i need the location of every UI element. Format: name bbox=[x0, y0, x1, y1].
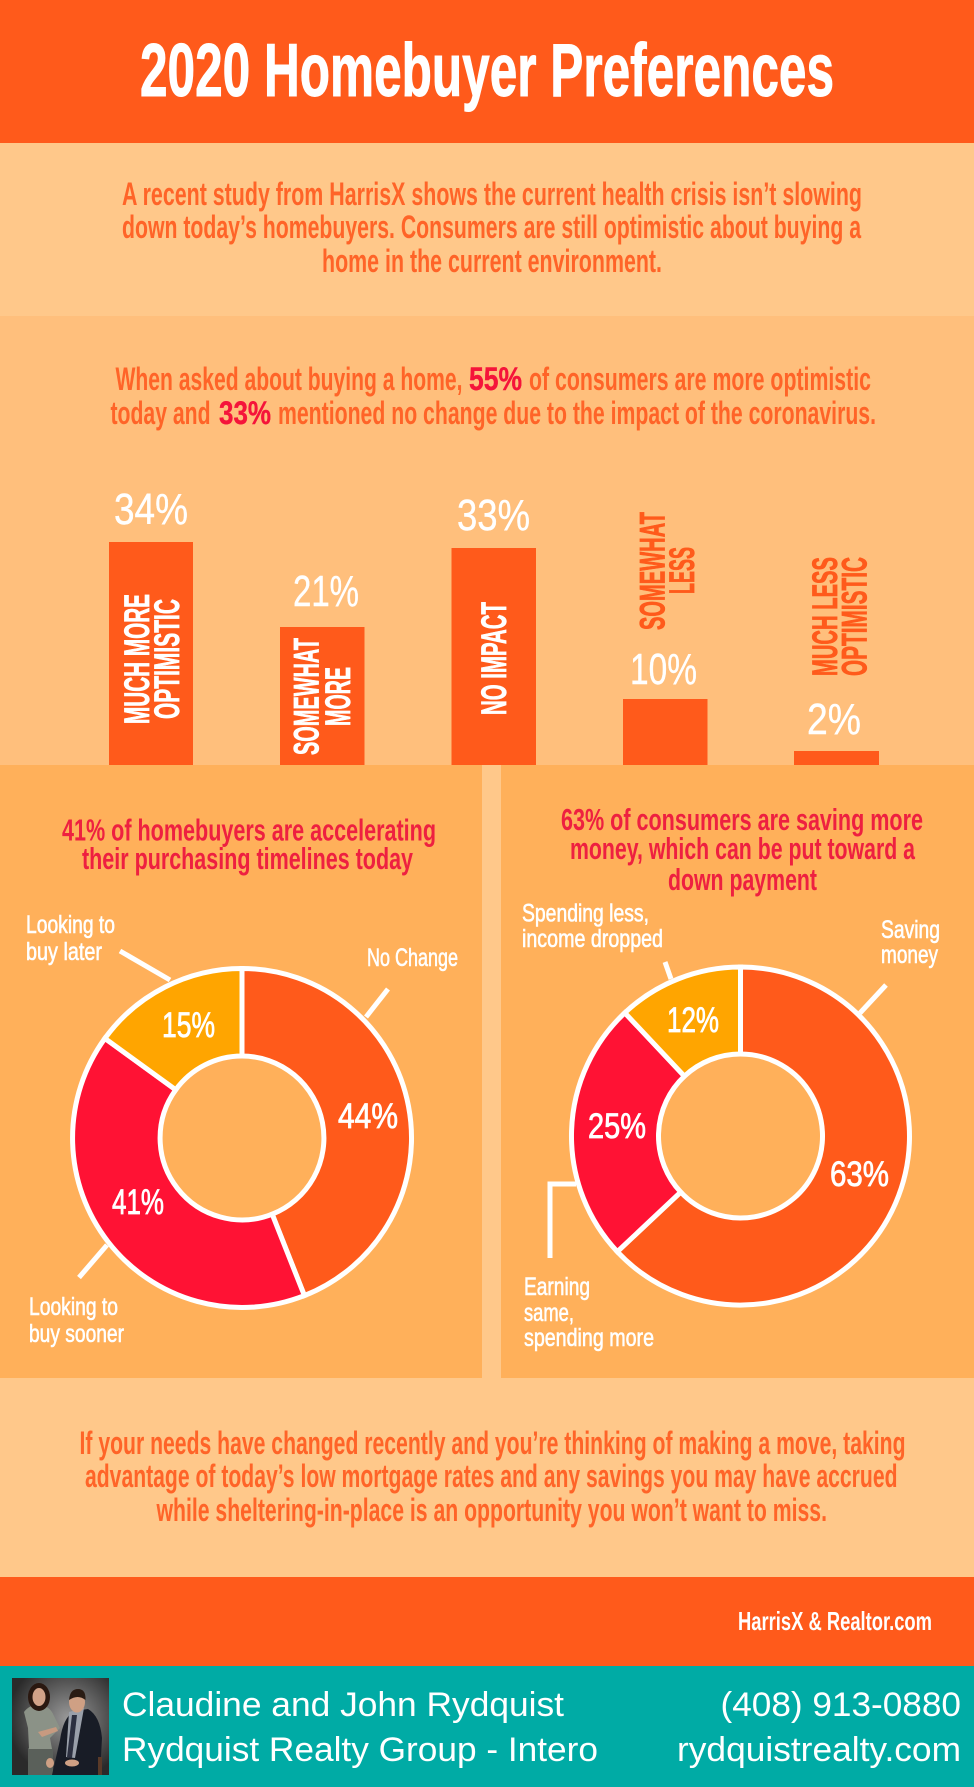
optimism summary text: When asked about buying a home, bbox=[116, 361, 462, 397]
callout: earning same, spending more bbox=[524, 1184, 654, 1352]
optimism summary text: 55% bbox=[469, 361, 522, 397]
callout: looking to buy sooner: Looking to bbox=[29, 1293, 118, 1321]
panel: purchasing timelines bbox=[0, 765, 482, 1378]
bar: no impact bbox=[452, 491, 536, 765]
callout: spending less, income dropped bbox=[522, 900, 671, 979]
heading: purchasing timelines: 41% of homebuyers are accelerating bbox=[62, 812, 436, 848]
contact details bbox=[677, 1686, 961, 1769]
panel: column gutter background bbox=[0, 765, 974, 1378]
bar: somewhat more: SOMEWHAT bbox=[288, 638, 326, 755]
agent names: Claudine and John Rydquist bbox=[122, 1686, 564, 1724]
bar: much more optimistic bbox=[109, 485, 193, 765]
heading: purchasing timelines bbox=[62, 812, 436, 876]
agent names: Rydquist Realty Group - Intero bbox=[122, 1731, 598, 1769]
value: 41%: 41% bbox=[112, 1183, 164, 1222]
callout: no change bbox=[366, 944, 458, 1017]
callout: saving money bbox=[860, 916, 940, 1013]
optimism summary text bbox=[110, 361, 876, 431]
callout: spending less, income dropped: Spending less, bbox=[522, 900, 649, 928]
segment: earning same, spending more 25% bbox=[571, 1013, 684, 1252]
bar: somewhat less: LESS bbox=[663, 547, 702, 594]
segment: saving money 63% bbox=[617, 967, 909, 1305]
bar chart bbox=[109, 485, 879, 765]
bar: somewhat less bbox=[623, 512, 708, 765]
bar: somewhat more bbox=[280, 567, 364, 765]
panel: optimism bar chart section bbox=[0, 316, 974, 765]
bar: much more optimistic: OPTIMISTIC bbox=[148, 599, 187, 719]
callout: no change: No Change bbox=[367, 944, 458, 972]
bar: much less optimistic bbox=[794, 557, 879, 765]
callout: looking to buy sooner bbox=[29, 1245, 124, 1348]
bar: much more optimistic: MUCH MORE bbox=[118, 594, 157, 724]
panel: introduction bbox=[0, 143, 974, 316]
panel: header banner bbox=[0, 0, 974, 143]
bar: somewhat more: 21% bbox=[293, 567, 359, 616]
callout: looking to buy later: buy later bbox=[26, 938, 102, 966]
optimism summary text: today and bbox=[110, 395, 210, 431]
panel: contact footer bbox=[0, 1666, 974, 1787]
segment: looking to buy later 15% bbox=[105, 968, 242, 1090]
value: 12%: 12% bbox=[667, 1001, 719, 1040]
bar: much less optimistic: MUCH LESS bbox=[806, 557, 845, 676]
optimism summary text: 33% bbox=[219, 395, 271, 431]
heading: purchasing timelines: their purchasing timelines today bbox=[82, 841, 414, 876]
value: 63%: 63% bbox=[830, 1155, 889, 1194]
bar: much less optimistic: OPTIMISTIC bbox=[836, 557, 874, 676]
bar: no impact: 33% bbox=[457, 491, 530, 540]
segment: looking to buy sooner 41% bbox=[73, 1038, 304, 1307]
heading: savings bbox=[561, 802, 923, 897]
bar: much more optimistic: 34% bbox=[114, 485, 188, 534]
bar: somewhat less: SOMEWHAT bbox=[634, 512, 672, 630]
agent photo bbox=[12, 1678, 109, 1775]
agent names bbox=[122, 1686, 598, 1769]
intro text block: home in the current environment. bbox=[322, 243, 662, 279]
contact details: (408) 913-0880 bbox=[720, 1686, 961, 1724]
callout: looking to buy later bbox=[26, 911, 170, 980]
panel: savings bbox=[501, 765, 974, 1378]
contact details: rydquistrealty.com bbox=[677, 1731, 961, 1769]
intro text block bbox=[122, 176, 862, 279]
panel: source bar bbox=[0, 1577, 974, 1666]
donut chart: savings bbox=[571, 967, 909, 1305]
bar: somewhat more: MORE bbox=[319, 667, 358, 726]
bar: somewhat less: 10% bbox=[630, 645, 697, 694]
heading: savings: down payment bbox=[668, 862, 817, 897]
callout: looking to buy later: Looking to bbox=[26, 911, 115, 939]
value: 25%: 25% bbox=[588, 1107, 646, 1146]
segment: no change 44% bbox=[242, 968, 412, 1296]
segment: spending less, income dropped 12% bbox=[625, 967, 740, 1076]
callout: looking to buy sooner: buy sooner bbox=[29, 1320, 124, 1348]
bar: no impact: NO IMPACT bbox=[475, 602, 514, 715]
callout: spending less, income dropped: income dropped bbox=[522, 925, 663, 953]
callout: earning same, spending more: Earning bbox=[524, 1273, 590, 1301]
value: 15%: 15% bbox=[162, 1006, 215, 1045]
donut chart: timelines bbox=[73, 968, 412, 1307]
callout: earning same, spending more: same, bbox=[524, 1299, 574, 1327]
panel: closing message bbox=[0, 1378, 974, 1577]
value: 44%: 44% bbox=[338, 1097, 398, 1136]
callout: saving money: Saving bbox=[881, 916, 940, 944]
callout: saving money: money bbox=[881, 941, 938, 969]
closing text block bbox=[80, 1425, 906, 1528]
bar: much less optimistic: 2% bbox=[807, 695, 861, 744]
callout: earning same, spending more: spending more bbox=[524, 1324, 654, 1352]
